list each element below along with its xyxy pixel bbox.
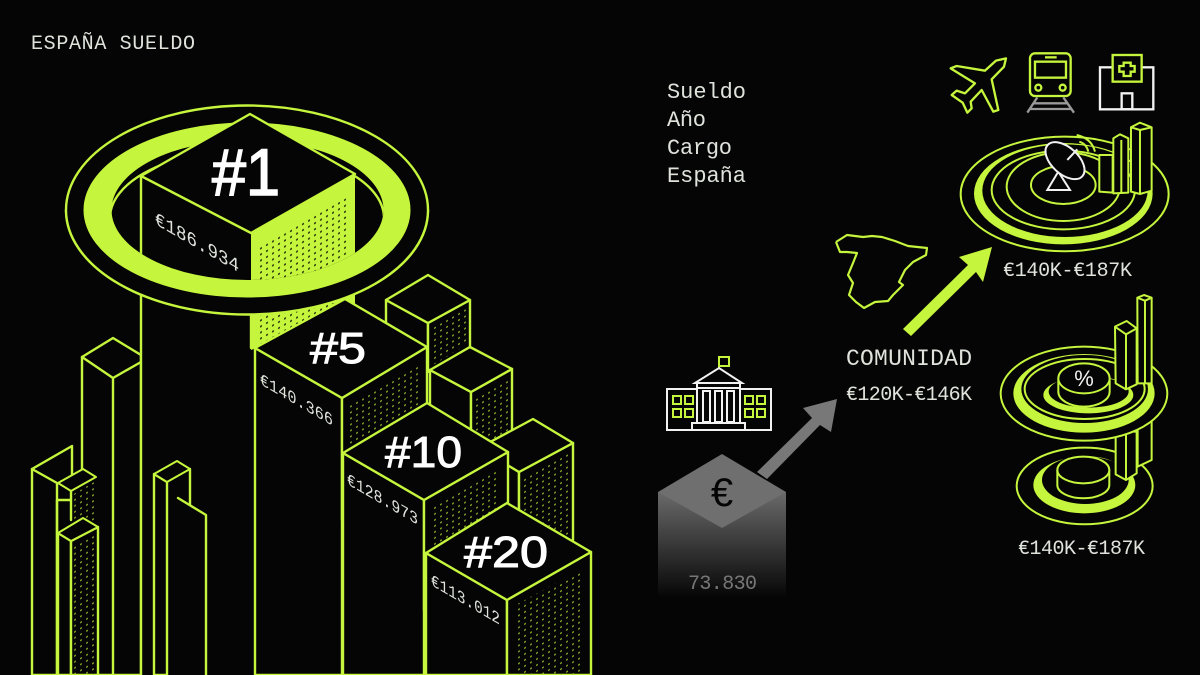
upper ring set [1001, 347, 1167, 441]
back box C [479, 419, 573, 570]
dotted pattern #1 [259, 194, 347, 392]
legend list: Cargo [667, 136, 732, 161]
finance rings and bars [1001, 295, 1167, 524]
back box B [430, 347, 512, 462]
outer ring, upper half [66, 106, 428, 314]
salary #20: €113.012 [431, 571, 500, 630]
dots #5 [350, 362, 420, 485]
legend list: España [667, 164, 746, 189]
title: ESPAÑA SUELDO [31, 31, 195, 56]
envelope amount: 73.830 [688, 573, 757, 596]
tower #1 [66, 106, 428, 675]
satellite dish [1039, 135, 1095, 190]
lower band over tower [67, 210, 427, 314]
upper bars [1115, 295, 1152, 389]
legend list: Año [667, 108, 706, 133]
left face #1 [141, 176, 251, 675]
gray arrow [757, 399, 837, 479]
ring lower half [84, 210, 410, 298]
icon: plane [951, 58, 1006, 113]
Spain map [836, 235, 927, 308]
range: comunidad: €120K-€146K [846, 384, 972, 407]
top face #1 [141, 114, 355, 233]
envelope [658, 454, 786, 596]
radar rings and bars [961, 123, 1169, 251]
building between towers [154, 461, 206, 675]
rank #1: #1 [212, 135, 280, 209]
rank #5: #5 [310, 324, 366, 373]
icon: hospital [1100, 55, 1153, 109]
dots #20 [516, 568, 583, 675]
tower #20 [426, 503, 591, 675]
range: lower right: €140K-€187K [1018, 538, 1145, 561]
percent symbol: % [1074, 366, 1094, 391]
left background buildings [32, 338, 141, 675]
inner ring line [112, 164, 384, 216]
salary #5: €140.366 [260, 370, 333, 432]
icon: government building [667, 357, 771, 430]
lower ring set [1017, 448, 1153, 524]
tower #5 [255, 299, 427, 675]
lower bars [1116, 418, 1152, 480]
rank #20: #20 [464, 528, 548, 577]
dots #10 [432, 466, 500, 578]
tower #10 [343, 403, 508, 675]
rank #10: #10 [385, 428, 462, 477]
right face #1 [251, 174, 355, 350]
label: comunidad: COMUNIDAD [846, 346, 972, 372]
bars [1099, 123, 1152, 194]
salary #1: €186.934 [155, 209, 239, 279]
back box A [386, 275, 470, 372]
outer line lower half [64, 210, 430, 316]
icon: train [1027, 53, 1074, 113]
salary #10: €128.973 [347, 470, 418, 531]
legend list: Sueldo [667, 80, 746, 105]
euro symbol: € [711, 471, 733, 515]
green arrow [903, 247, 992, 336]
green ring [84, 122, 410, 298]
legend list [667, 80, 746, 189]
range: top right: €140K-€187K [1003, 260, 1132, 283]
radar rings [961, 137, 1169, 251]
